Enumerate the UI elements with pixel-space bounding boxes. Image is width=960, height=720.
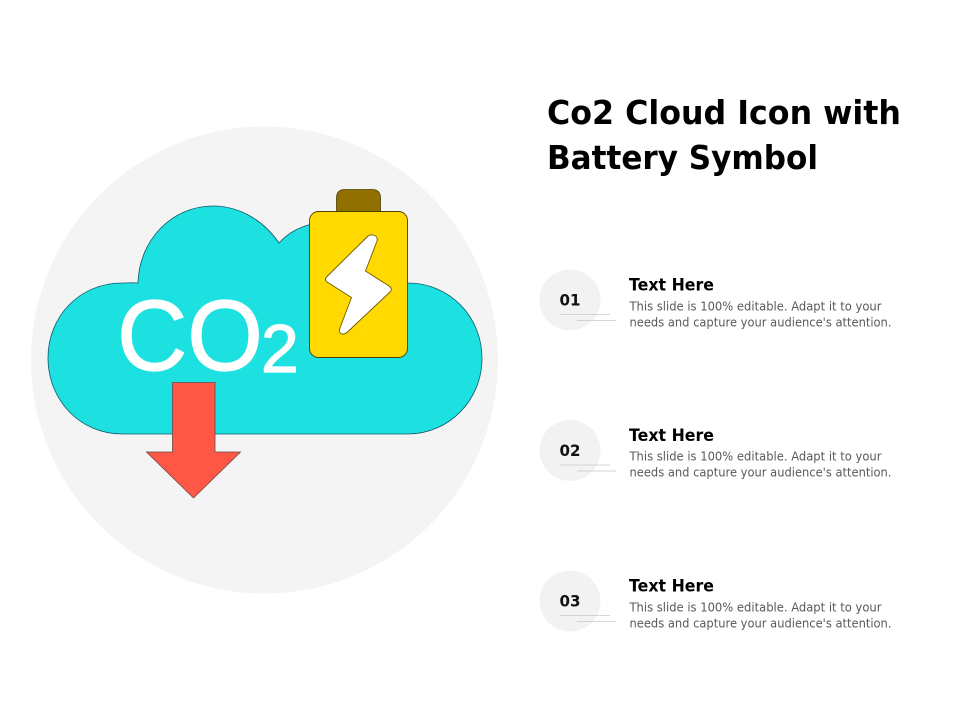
heading: Text Here xyxy=(629,576,714,596)
body line 1: This slide is 100% editable. Adapt it to your xyxy=(629,450,882,464)
arrow: down xyxy=(146,382,240,498)
battery cap xyxy=(336,190,380,212)
number: 01 xyxy=(560,290,580,310)
subscript 2: 2 xyxy=(261,311,299,387)
title xyxy=(547,93,901,177)
number badge xyxy=(540,570,600,632)
item 02 xyxy=(540,420,892,481)
number: 02 xyxy=(560,441,580,460)
item 01 xyxy=(540,270,892,330)
battery body xyxy=(310,212,408,358)
heading: Text Here xyxy=(629,276,714,296)
body line 2: needs and capture your audience's attention. xyxy=(630,316,892,330)
lightning bolt xyxy=(325,235,391,334)
accent lines xyxy=(560,465,616,471)
CO2 label: CO xyxy=(117,280,263,392)
body line 2: needs and capture your audience's attention. xyxy=(630,616,892,630)
body line 1: This slide is 100% editable. Adapt it to your xyxy=(629,600,882,614)
body line 2: needs and capture your audience's attention. xyxy=(630,466,892,480)
icon: battery xyxy=(310,190,408,358)
heading: Text Here xyxy=(629,426,714,446)
number: 03 xyxy=(560,592,580,610)
accent lines xyxy=(560,314,616,320)
body line 1: This slide is 100% editable. Adapt it to your xyxy=(629,300,882,314)
title line 1: Co2 Cloud Icon with xyxy=(547,93,901,132)
accent lines xyxy=(560,616,616,622)
background circle xyxy=(31,126,498,594)
number badge xyxy=(540,270,600,330)
title line 2: Battery Symbol xyxy=(547,138,818,177)
icon: CO2 cloud xyxy=(48,206,482,434)
cloud shape xyxy=(48,206,482,434)
number badge xyxy=(540,420,600,481)
item 03 xyxy=(540,570,892,632)
